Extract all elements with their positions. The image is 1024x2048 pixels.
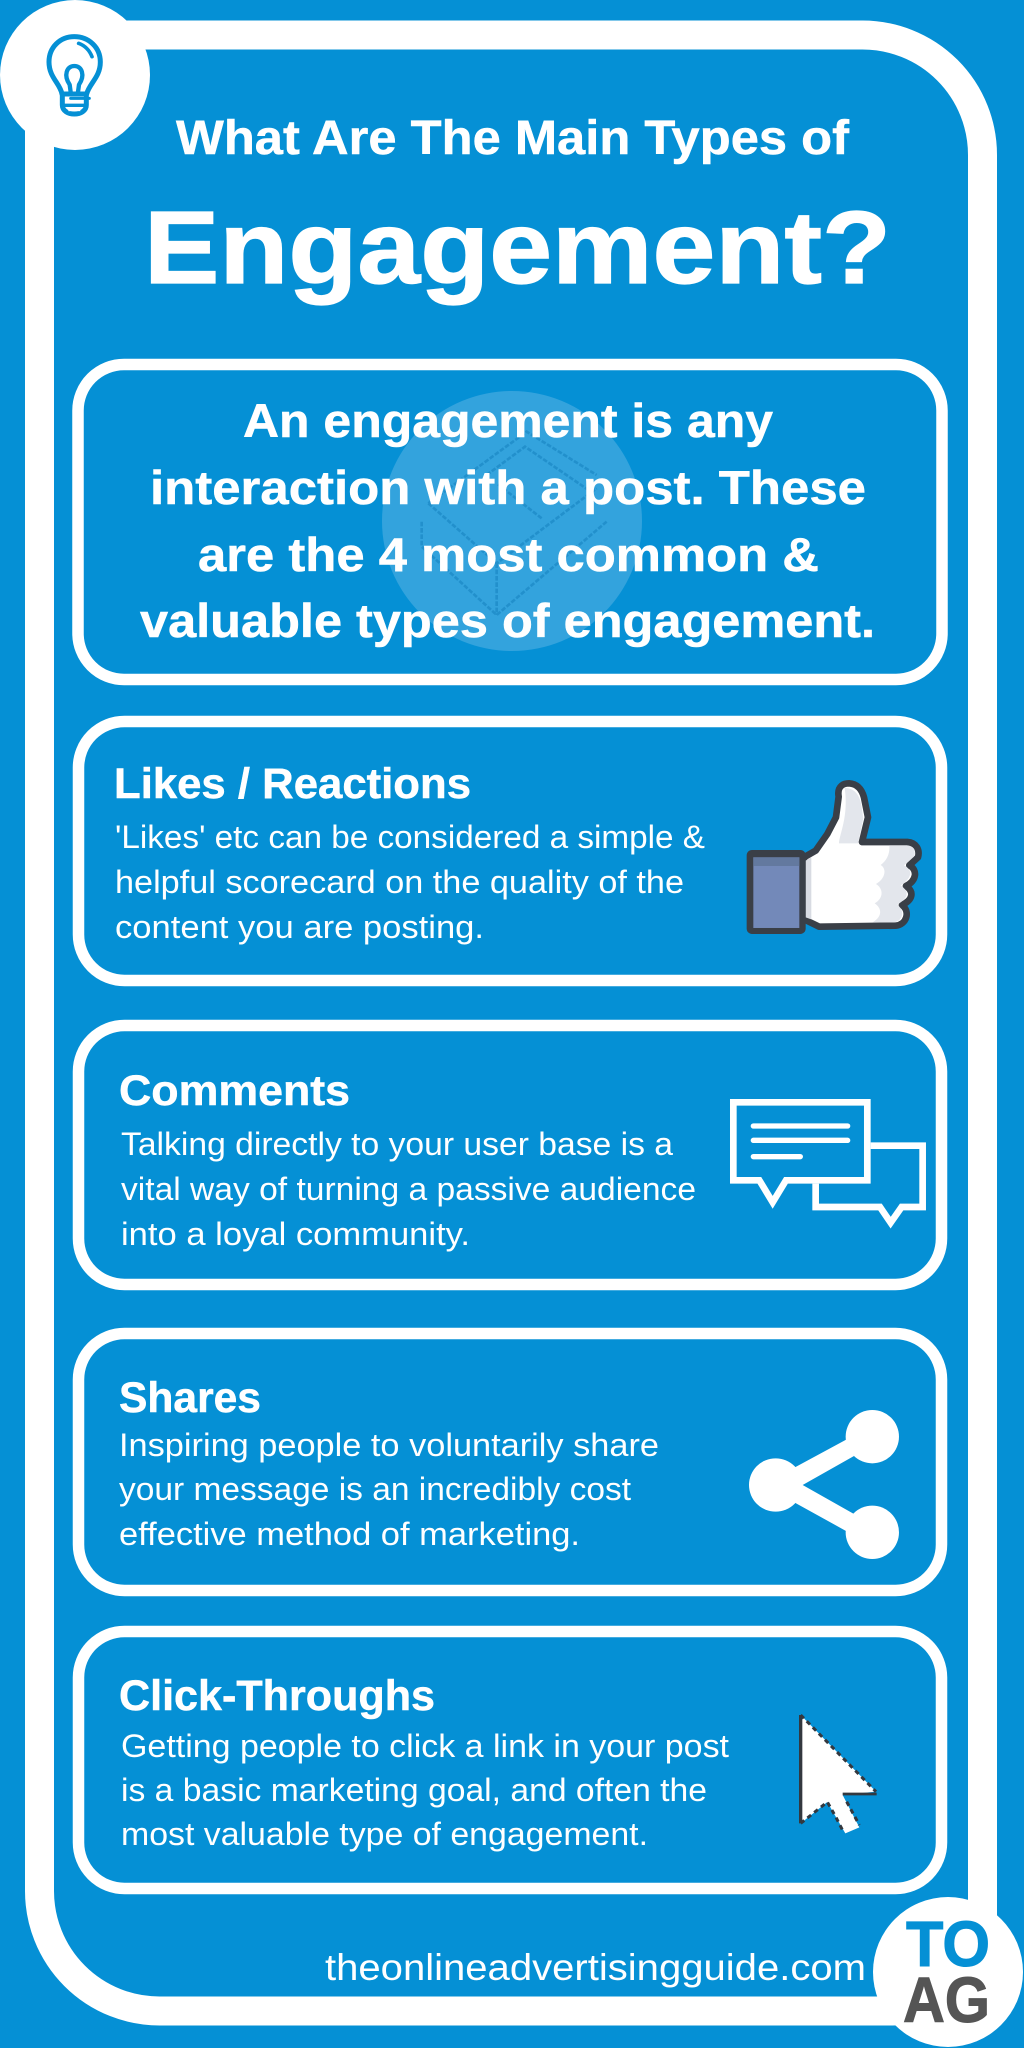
- heading: shares: Shares: [119, 1374, 261, 1422]
- heading: likes: Likes / Reactions: [114, 760, 471, 808]
- footer website address: theonlineadvertisingguide.com: [325, 1947, 866, 1988]
- heading: click-throughs: Click-Throughs: [119, 1672, 435, 1720]
- logo badge: TOAG: [873, 1897, 1023, 2047]
- description: likes: helpful scorecard on the quality of the: [115, 864, 684, 900]
- description: comments: vital way of turning a passive audience: [121, 1171, 696, 1207]
- heading: comments: Comments: [119, 1067, 350, 1115]
- definition text: are the 4 most common &: [198, 528, 819, 581]
- description: click-throughs: Getting people to click a link in your post: [121, 1728, 729, 1764]
- description: click-throughs: [121, 1728, 729, 1852]
- title: [144, 112, 891, 305]
- panel: comments: [78, 1026, 942, 1284]
- description: comments: Talking directly to your user base is a: [121, 1126, 673, 1162]
- panel: shares: [78, 1334, 942, 1590]
- description: comments: [121, 1126, 696, 1252]
- panel: definition: [78, 364, 942, 680]
- description: likes: content you are posting.: [115, 909, 484, 945]
- description: click-throughs: most valuable type of engagement.: [121, 1816, 648, 1852]
- description: shares: Inspiring people to voluntarily share: [119, 1427, 659, 1463]
- description: likes: 'Likes' etc can be considered a simple &: [115, 819, 705, 855]
- description: shares: effective method of marketing.: [119, 1516, 580, 1552]
- description: shares: [119, 1427, 659, 1552]
- logo text AG: AG: [903, 1964, 990, 2036]
- panel: likes and reactions: [78, 722, 942, 980]
- definition text: interaction with a post. These: [150, 461, 866, 514]
- definition text: valuable types of engagement.: [140, 594, 875, 647]
- icon: light bulb badge: [0, 0, 150, 150]
- title line two: Engagement?: [144, 190, 891, 305]
- icon: mouse cursor: [801, 1715, 877, 1833]
- definition text: An engagement is any: [243, 394, 773, 447]
- description: comments: into a loyal community.: [121, 1216, 470, 1252]
- description: shares: your message is an incredibly cost: [119, 1471, 631, 1507]
- icon: share: [749, 1410, 899, 1559]
- icon: speech bubbles: [733, 1102, 923, 1223]
- logo text TO: TO: [906, 1908, 990, 1980]
- panel: click-throughs: [78, 1632, 942, 1888]
- definition text: [140, 394, 875, 647]
- icon: thumbs up: [747, 783, 919, 934]
- description: likes: [115, 819, 705, 945]
- watermark: faint circle with box: [382, 391, 642, 651]
- description: click-throughs: is a basic marketing goal, and often the: [121, 1772, 707, 1808]
- title line one: What Are The Main Types of: [176, 112, 850, 165]
